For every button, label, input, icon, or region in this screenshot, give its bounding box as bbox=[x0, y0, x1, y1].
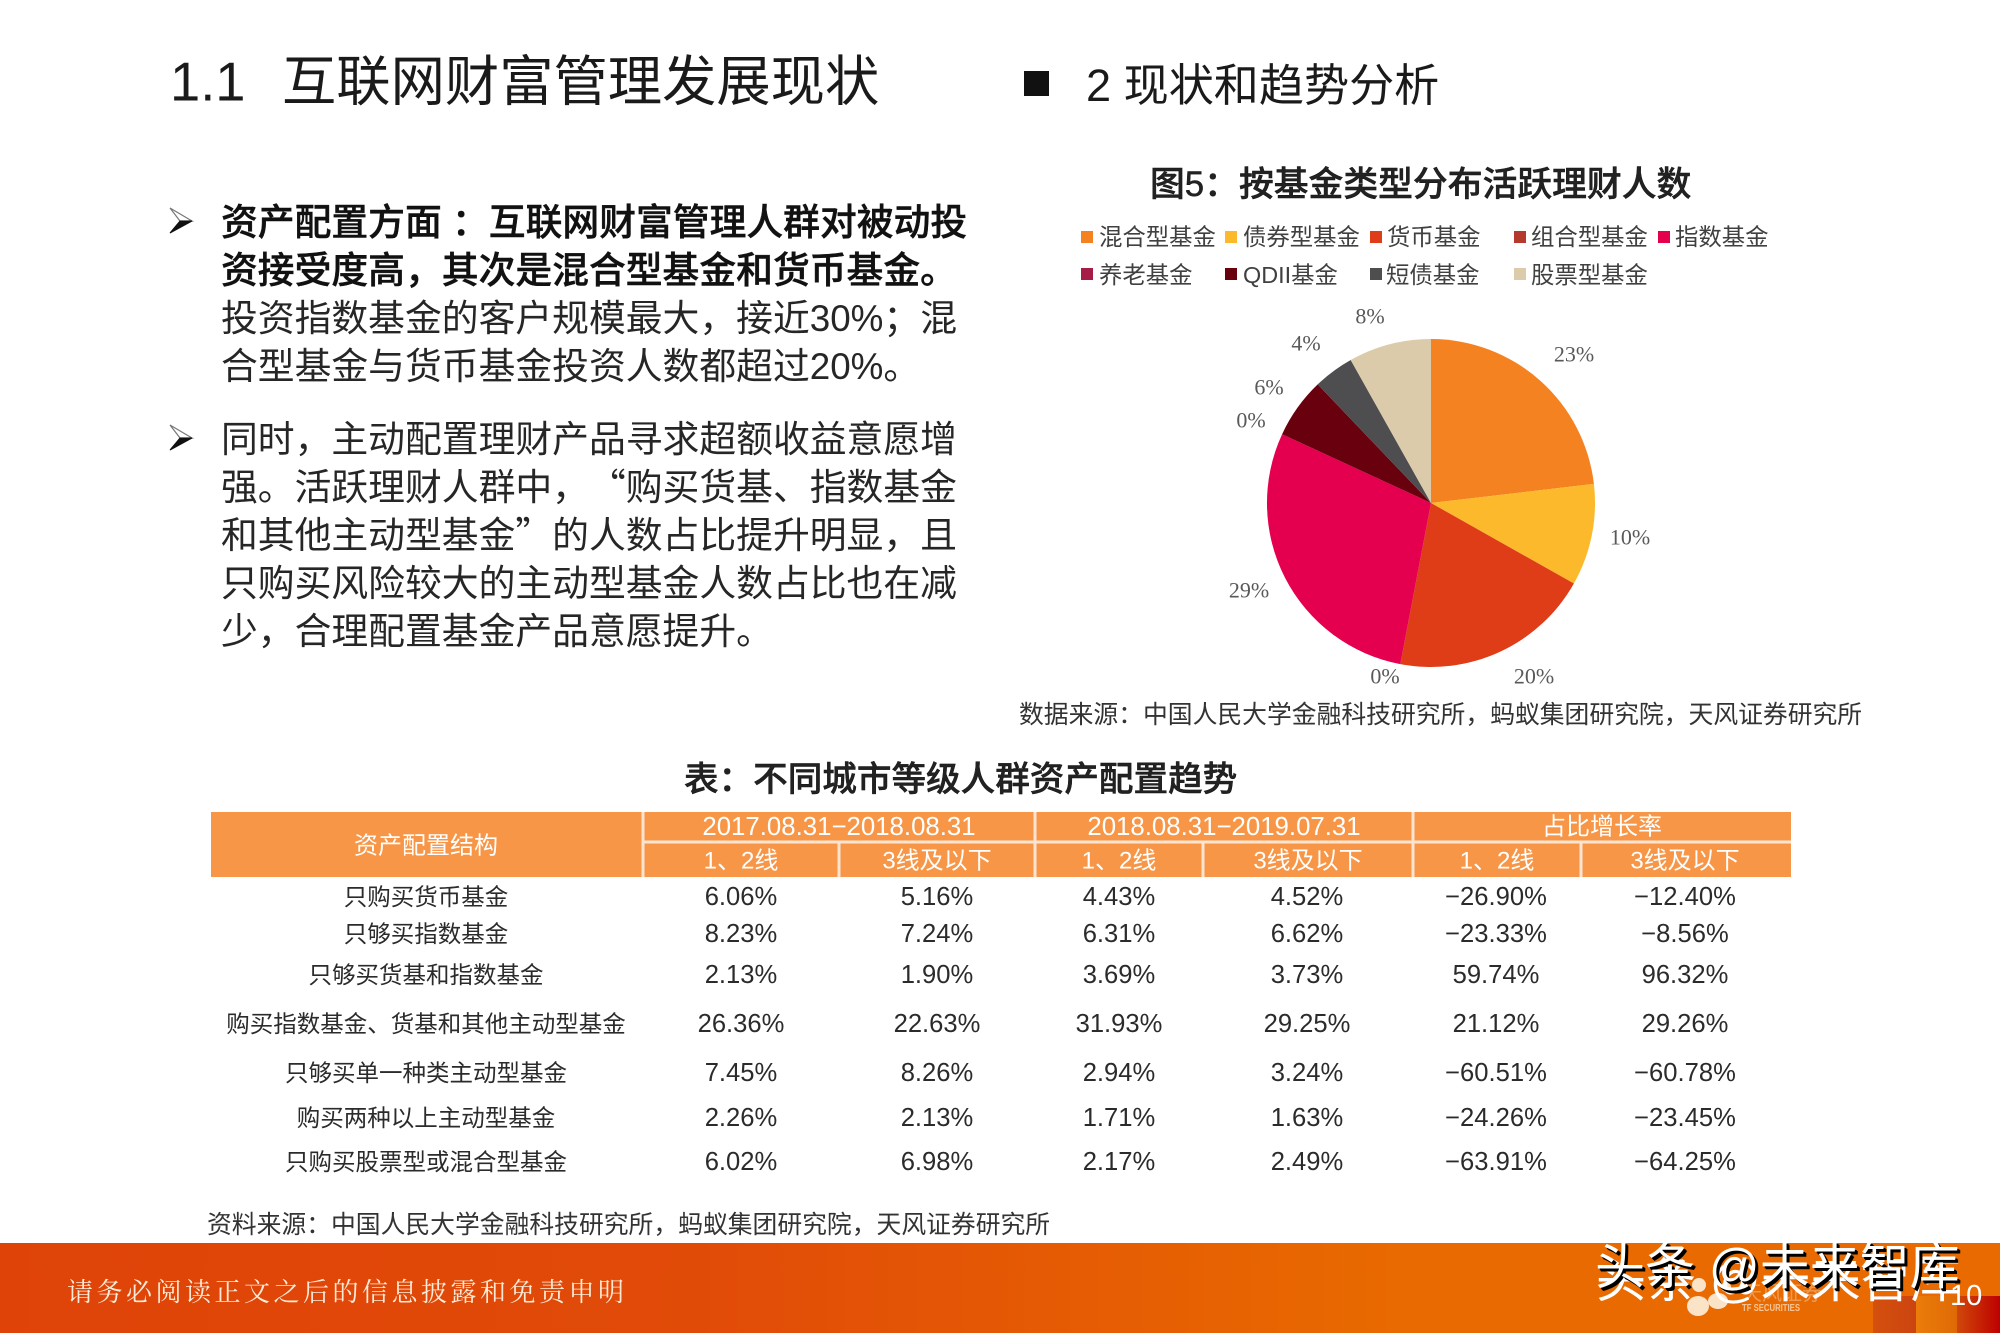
legend: 短债基金 bbox=[1386, 262, 1480, 288]
footer decorative blocks bbox=[1873, 1296, 2000, 1333]
text block: asset allocation: 资产配置方面 ：互联网财富管理人群对被动投 bbox=[221, 202, 967, 243]
text block: asset allocation: 资接受度高，其次是混合型基金和货币基金。 bbox=[221, 250, 957, 291]
table row 6: 1.71% bbox=[1083, 1104, 1155, 1132]
table header: 3线及以下 bbox=[1630, 848, 1740, 874]
table header: 3线及以下 bbox=[1253, 848, 1363, 874]
table row 1: 只购买货币基金 bbox=[344, 884, 508, 910]
table row 4: 22.63% bbox=[894, 1010, 980, 1038]
table row 5: −60.78% bbox=[1634, 1059, 1736, 1087]
icon: arrow bullet 2 bbox=[170, 424, 194, 450]
pie chart: 23% bbox=[1554, 342, 1594, 366]
table row 1: −26.90% bbox=[1445, 883, 1547, 911]
legend: 债券型基金 bbox=[1243, 224, 1360, 250]
footer bar bbox=[0, 1243, 2000, 1333]
legend bbox=[1081, 224, 1769, 288]
title: 互联网财富管理发展现状 bbox=[282, 52, 879, 112]
table row 5 bbox=[285, 1059, 1736, 1087]
table row 4: 31.93% bbox=[1076, 1010, 1162, 1038]
table row 4 bbox=[226, 1010, 1728, 1038]
footer disclaimer: 请务必阅读正文之后的信息披露和免责申明 bbox=[67, 1272, 628, 1309]
legend: 养老基金 bbox=[1099, 262, 1193, 288]
pie chart: 8% bbox=[1355, 304, 1385, 328]
table row 6: 购买两种以上主动型基金 bbox=[297, 1105, 555, 1131]
text block: active allocation: 同时，主动配置理财产品寻求超额收益意愿增 bbox=[221, 419, 957, 460]
table row 3: 3.73% bbox=[1271, 961, 1343, 989]
table row 4: 21.12% bbox=[1453, 1010, 1539, 1038]
table row 6: −23.45% bbox=[1634, 1104, 1736, 1132]
table row 2 bbox=[344, 920, 1729, 948]
table row 2: 只够买指数基金 bbox=[344, 921, 508, 947]
text block: active allocation: 少，合理配置基金产品意愿提升。 bbox=[221, 611, 773, 652]
table row 5: 8.26% bbox=[901, 1059, 973, 1087]
table row 7: −63.91% bbox=[1445, 1148, 1547, 1176]
table row 2: 6.31% bbox=[1083, 920, 1155, 948]
title: 1.1 bbox=[170, 52, 245, 112]
table row 7: 6.98% bbox=[901, 1148, 973, 1176]
table row 3: 59.74% bbox=[1453, 961, 1539, 989]
table row 3: 1.90% bbox=[901, 961, 973, 989]
table row 5: 只够买单一种类主动型基金 bbox=[285, 1060, 567, 1086]
text block: asset allocation: 投资指数基金的客户规模最大，接近30%；混 bbox=[221, 298, 957, 339]
table row 5: 7.45% bbox=[705, 1059, 777, 1087]
pie chart: 0% bbox=[1236, 408, 1266, 432]
watermark ghost: 头条 @未来智库 bbox=[1596, 1252, 1961, 1308]
pie chart: 10% bbox=[1610, 524, 1650, 550]
table row 1: 4.52% bbox=[1271, 883, 1343, 911]
table row 6: 2.26% bbox=[705, 1104, 777, 1132]
table row 7: 2.49% bbox=[1271, 1148, 1343, 1176]
table row 2: −23.33% bbox=[1445, 920, 1547, 948]
text block: active allocation: 只购买风险较大的主动型基金人数占比也在减 bbox=[221, 563, 957, 604]
table row 1: 4.43% bbox=[1083, 883, 1155, 911]
table row 7: 6.02% bbox=[705, 1148, 777, 1176]
chart title: 图5：按基金类型分布活跃理财人数 bbox=[1150, 165, 1691, 204]
text block: active allocation: 强。活跃理财人群中，“购买货基、指数基金 bbox=[221, 457, 957, 511]
table row 1: −12.40% bbox=[1634, 883, 1736, 911]
section heading bbox=[1024, 60, 1439, 111]
table header bbox=[211, 812, 1791, 877]
table row 7: −64.25% bbox=[1634, 1148, 1736, 1176]
table header: 占比增长率 bbox=[1542, 814, 1662, 840]
logo: TF SECURITIES bbox=[1742, 1302, 1800, 1314]
table row 5: 3.24% bbox=[1271, 1059, 1343, 1087]
table row 1: 5.16% bbox=[901, 883, 973, 911]
table header: 3线及以下 bbox=[882, 848, 992, 874]
table row 3: 96.32% bbox=[1642, 961, 1728, 989]
table row 6: 1.63% bbox=[1271, 1104, 1343, 1132]
table row 1 bbox=[344, 883, 1736, 911]
icon: square bullet bbox=[1024, 71, 1049, 96]
table row 2: 8.23% bbox=[705, 920, 777, 948]
table row 7: 2.17% bbox=[1083, 1148, 1155, 1176]
table row 5: 2.94% bbox=[1083, 1059, 1155, 1087]
legend: QDII基金 bbox=[1243, 262, 1338, 288]
table title: 表：不同城市等级人群资产配置趋势 bbox=[684, 761, 1237, 799]
table header: 1、2线 bbox=[1082, 848, 1156, 874]
logo bbox=[1687, 1278, 1822, 1316]
table row 5: −60.51% bbox=[1445, 1059, 1547, 1087]
table header: 2018.08.31−2019.07.31 bbox=[1087, 813, 1361, 841]
table row 1: 6.06% bbox=[705, 883, 777, 911]
table row 4: 26.36% bbox=[698, 1010, 784, 1038]
table row 3 bbox=[308, 961, 1728, 989]
table row 7 bbox=[285, 1148, 1736, 1176]
table row 4: 购买指数基金、货基和其他主动型基金 bbox=[226, 1011, 626, 1037]
table row 3: 2.13% bbox=[705, 961, 777, 989]
text block: active allocation bbox=[221, 419, 957, 652]
pie chart: 6% bbox=[1254, 374, 1284, 400]
table row 6 bbox=[297, 1104, 1736, 1132]
pie chart: 20% bbox=[1514, 664, 1554, 688]
table source: 资料来源：中国人民大学金融科技研究所，蚂蚁集团研究院，天风证券研究所 bbox=[207, 1212, 1050, 1239]
chart source: 数据来源：中国人民大学金融科技研究所，蚂蚁集团研究院，天风证券研究所 bbox=[1019, 702, 1862, 729]
legend: 股票型基金 bbox=[1531, 262, 1648, 288]
legend: 指数基金 bbox=[1675, 224, 1769, 250]
table row 2: 6.62% bbox=[1271, 920, 1343, 948]
text block: asset allocation bbox=[221, 202, 967, 387]
table row 2: 7.24% bbox=[901, 920, 973, 948]
icon: arrow bullet 1 bbox=[170, 208, 194, 234]
table row 6: 2.13% bbox=[901, 1104, 973, 1132]
table row 4: 29.26% bbox=[1642, 1010, 1728, 1038]
text block: active allocation: 和其他主动型基金”的人数占比提升明显，且 bbox=[221, 505, 957, 559]
table header: 1、2线 bbox=[1460, 848, 1534, 874]
table row 6: −24.26% bbox=[1445, 1104, 1547, 1132]
section heading text: 2 现状和趋势分析 bbox=[1086, 60, 1439, 111]
legend: 混合型基金 bbox=[1099, 224, 1216, 250]
table header: 1、2线 bbox=[704, 848, 778, 874]
logo: 天风证券 bbox=[1742, 1282, 1822, 1305]
table row 7: 只购买股票型或混合型基金 bbox=[285, 1149, 567, 1175]
legend: 货币基金 bbox=[1387, 224, 1481, 250]
table header: 资产配置结构 bbox=[354, 832, 498, 860]
pie chart: 4% bbox=[1291, 330, 1321, 356]
table header: 2017.08.31−2018.08.31 bbox=[702, 813, 976, 841]
table row 3: 只够买货基和指数基金 bbox=[308, 962, 544, 988]
legend: 组合型基金 bbox=[1531, 224, 1648, 250]
page number: 10 bbox=[1950, 1280, 1982, 1312]
watermark: 头条 @未来智库 bbox=[1595, 1239, 1960, 1295]
table row 3: 3.69% bbox=[1083, 961, 1155, 989]
pie chart: 0% bbox=[1370, 664, 1400, 688]
text block: asset allocation: 合型基金与货币基金投资人数都超过20%。 bbox=[221, 346, 920, 387]
table row 2: −8.56% bbox=[1641, 920, 1729, 948]
table row 4: 29.25% bbox=[1264, 1010, 1350, 1038]
pie chart: 29% bbox=[1229, 578, 1269, 602]
